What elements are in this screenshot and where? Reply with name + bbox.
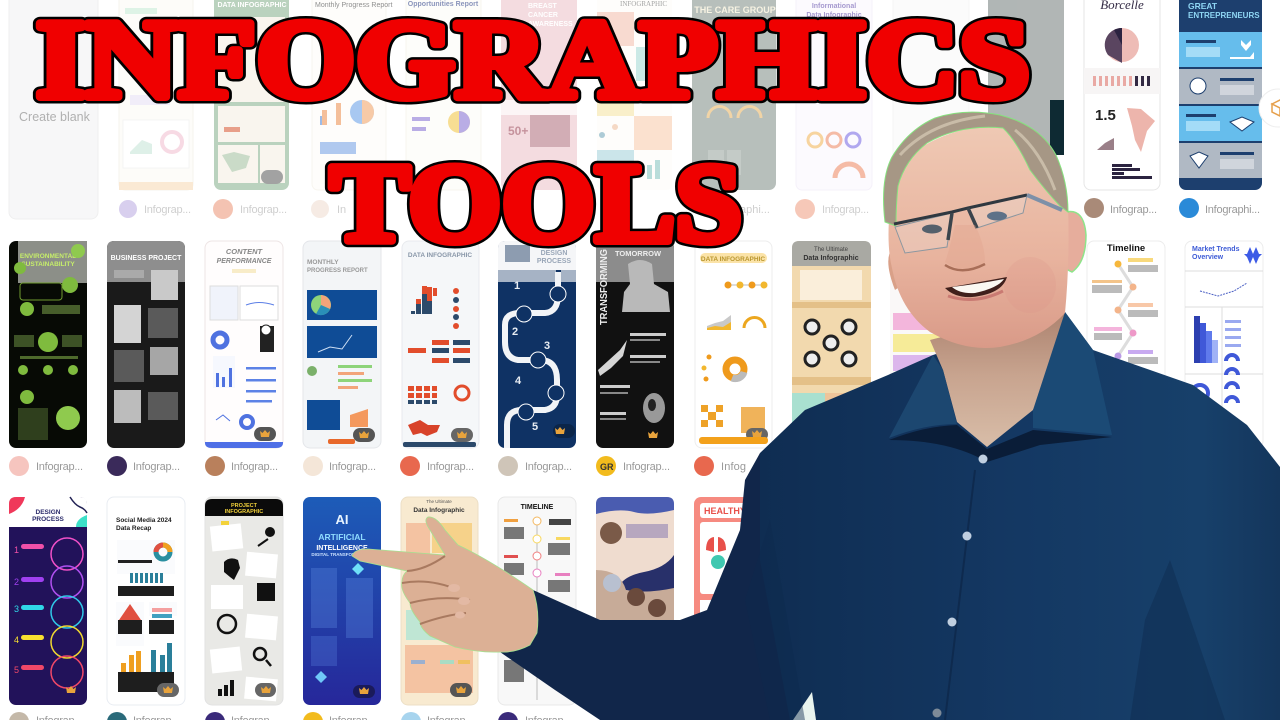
panel: top row faded templates: Data Infographic <box>806 12 862 19</box>
panel: row 3 template design process purple: 1 <box>14 545 19 555</box>
panel: top row entrepreneurs template: ENTREPRENEURS <box>1188 11 1260 20</box>
panel: row 3 template beige data infographic: The Ultimate <box>426 499 452 504</box>
glasses temple <box>1027 195 1062 210</box>
panel: top row faded templates: CANCER <box>528 12 558 19</box>
shirt torso <box>760 312 1280 720</box>
panel: row 3 template healthy: HEALTHY <box>704 506 746 516</box>
panel: row 3 template design process purple: 3 <box>14 604 19 614</box>
labels: row 2 creators: Infograp... <box>36 461 83 473</box>
title: INFOGRAPHICS: INFOGRAPHICS <box>36 0 1030 122</box>
panel: top row faded templates: AWARENESS <box>528 21 573 28</box>
panel: row 2 template content performance: PERFORMANCE <box>217 258 272 265</box>
shirt buttons <box>932 454 988 718</box>
title: TOOLS: TOOLS <box>330 142 742 266</box>
labels: row 2 creators: Infograp... <box>525 461 572 473</box>
panel: row 3 template beige data infographic: Data Infographic <box>413 507 465 514</box>
labels: top row creators: Infograp... <box>1110 204 1157 216</box>
panel: row 3 template healthy <box>694 497 754 627</box>
pointing arm sleeve <box>500 453 830 720</box>
cheek blush <box>1004 257 1056 313</box>
panel: row 3 template beige data infographic <box>401 497 478 705</box>
panel: row 3 template artificial intelligence: AI <box>336 512 348 527</box>
glasses lenses <box>895 195 1027 253</box>
panel: create blank card: Create blank <box>19 110 91 124</box>
panel: top row faded templates: Opportunities Report <box>408 1 479 8</box>
panel: row 2 template orange data infographic: DATA INFOGRAPHIC <box>701 256 765 263</box>
panel: top row faded templates: Monthly Progress Report <box>315 2 392 9</box>
panel: row 2 template beige data infographic <box>792 241 871 448</box>
panel: row 2 template beige data infographic: The Ultimate <box>814 247 849 253</box>
person: presenter <box>352 112 1280 720</box>
panel: top row dark strip <box>1050 100 1064 155</box>
panel: row 3 template design process purple: 5 <box>14 665 19 675</box>
panel: row 3 template social media: Data Recap <box>116 525 151 532</box>
panel: row 3 template artificial intelligence <box>303 497 381 705</box>
labels: row 2 creators: Infograp... <box>231 461 278 473</box>
icon: side widget <box>1259 89 1280 127</box>
labels: top row creators <box>119 198 1260 219</box>
finger nails <box>448 584 470 618</box>
panel: row 2 template orange data infographic <box>695 241 772 448</box>
panel: row 3 template artificial intelligence: ARTIFICIAL <box>318 532 366 542</box>
lower lip <box>948 291 1003 300</box>
finger creases <box>402 556 470 624</box>
nose shadow <box>945 264 985 270</box>
panel: top row entrepreneurs template <box>1179 0 1262 190</box>
panel: row 3 template project infographic <box>205 497 283 705</box>
glasses bridge <box>948 208 977 240</box>
panel: row 2 template market trends <box>1185 241 1263 448</box>
panel: row 2 template market trends: Overview <box>1192 254 1224 261</box>
panel: row 2 template market trends: Market Trends <box>1192 246 1240 253</box>
panel: top row entrepreneurs template: GREAT <box>1188 1 1218 11</box>
panel: top row faded templates: Informational <box>812 3 856 10</box>
labels: row 2 creators: Infograp... <box>427 461 474 473</box>
panel: row 3 template social media: Social Media 2024 <box>116 517 172 524</box>
neck <box>930 305 1065 447</box>
panel: row 2 template transforming tomorrow <box>596 241 674 448</box>
panel: row 2 template design process: 5 <box>532 421 538 433</box>
panel: row 2 template pink partly hidden <box>890 241 950 448</box>
panel: row 2 template beige data infographic: Data Infographic <box>803 255 859 262</box>
panel: row 2 template monthly report <box>303 241 381 448</box>
labels: top row creators: Infograp... <box>240 204 287 216</box>
title: INFOGRAPHICS: INFOGRAPHICS <box>36 0 1030 122</box>
panel: row 2 template business project: BUSINESS PROJECT <box>111 255 182 262</box>
panel: row 2 template data infographic <box>402 241 479 448</box>
panel: row 3 template project infographic: PROJECT <box>231 503 258 509</box>
panel: row 2 template timeline: Timeline <box>1107 243 1145 254</box>
panel: row 2 template design process: 3 <box>544 340 550 352</box>
panel: row 2 template design process: 2 <box>512 326 518 338</box>
panel: row 2 template design process: DESIGN <box>541 250 567 257</box>
panel: row 3 template design process purple: PROCESS <box>32 516 65 523</box>
panel: row 2 template monthly report: PROGRESS REPORT <box>307 268 368 274</box>
labels: top row creators: Infographi... <box>1205 204 1260 216</box>
left collar wing <box>889 355 957 438</box>
right ear <box>1064 211 1086 272</box>
panel: row 2 template transforming tomorrow: TOMORROW <box>615 249 662 258</box>
nose <box>945 225 985 268</box>
collar shadow <box>889 425 1112 462</box>
panel: row 2 template environmental: ENVIRONMENTAL <box>20 253 76 260</box>
panel: row 3 template design process purple: 2 <box>14 577 19 587</box>
panel: row 2 template data infographic: DATA INFOGRAPHIC <box>408 252 472 259</box>
panel: create blank card <box>9 0 98 219</box>
panel: row 3 template artificial intelligence: DIGITAL TRANSFORMATION <box>311 552 373 557</box>
panel: row 2 template transforming tomorrow: TRANSFORMING <box>599 249 610 325</box>
title: TOOLS: TOOLS <box>330 142 742 266</box>
panel: top row faded templates: THE CARE GROUP <box>694 5 776 15</box>
panel: top row Borcelle template <box>1084 0 1160 190</box>
panel: row 3 template photo infographic <box>596 497 674 627</box>
panel: row 2 template environmental: SUSTAINABILITY <box>21 261 75 268</box>
panel: row 2 template monthly report: MONTHLY <box>307 259 339 266</box>
panel: top row faded templates: BREAST <box>528 3 558 10</box>
labels: row 2 creators: Infograp... <box>329 461 376 473</box>
hair highlights <box>900 116 1055 190</box>
labels: row 2 creators <box>9 456 746 476</box>
panel: row 3 template social media <box>107 497 185 705</box>
left ear <box>888 250 902 290</box>
hand pointing <box>352 517 538 652</box>
labels: top row creators: aphi... <box>740 204 770 216</box>
panel: row 2 template environmental <box>9 241 87 448</box>
right collar wing <box>1033 312 1112 435</box>
panel: top row faded templates <box>119 0 1064 190</box>
panel: row 2 template design process: 1 <box>514 280 520 292</box>
panel: row 2 template content performance <box>205 241 283 448</box>
panel: row 2 template timeline <box>1087 241 1165 391</box>
gap between arm and torso <box>793 692 816 720</box>
labels: row 2 creators: Infog <box>721 461 746 473</box>
labels: row 3 creators <box>9 712 572 720</box>
panel: top row Borcelle template: 1.5 <box>1095 107 1116 124</box>
labels: top row creators: In <box>337 204 346 216</box>
panel: row 2 template business project <box>107 241 185 448</box>
panel: row 2 template design process: 4 <box>515 375 522 387</box>
panel: row 2 template design process <box>498 241 576 448</box>
face <box>888 125 1069 348</box>
shirt fold shadows <box>745 520 1225 720</box>
teeth <box>952 279 1004 293</box>
labels: top row creators: Infograp... <box>144 204 191 216</box>
panel: row 3 template design process purple: 4 <box>14 635 19 645</box>
hair <box>884 112 1068 226</box>
panel: row 3 template project infographic: INFOGRAPHIC <box>225 509 263 515</box>
labels: row 2 creators: GR <box>600 462 614 472</box>
panel: row 2 template content performance: CONTENT <box>226 247 264 256</box>
placket line <box>945 470 975 720</box>
panel: row 3 template design process purple: DESIGN <box>36 509 61 516</box>
labels: row 2 creators: Infograp... <box>133 461 180 473</box>
glasses frame <box>894 195 1027 224</box>
panel: top row faded templates: 50+ <box>508 124 528 138</box>
right eye <box>987 212 1007 220</box>
labels: top row creators: Infograp... <box>822 204 869 216</box>
panel: row 3 template timeline <box>498 497 576 705</box>
panel: row 3 template artificial intelligence: INTELLIGENCE <box>316 545 368 552</box>
panel: top row faded templates: DATA INFOGRAPHIC <box>217 2 287 9</box>
panel: row 3 template timeline: TIMELINE <box>521 504 554 511</box>
panel: row 3 template design process purple <box>9 497 87 705</box>
smile <box>945 277 1007 297</box>
labels: row 2 creators: Infograp... <box>623 461 670 473</box>
panel: row 2 template design process: PROCESS <box>537 258 571 265</box>
panel: top row faded templates: INFOGRAPHIC <box>620 0 667 8</box>
left eye <box>922 224 942 234</box>
